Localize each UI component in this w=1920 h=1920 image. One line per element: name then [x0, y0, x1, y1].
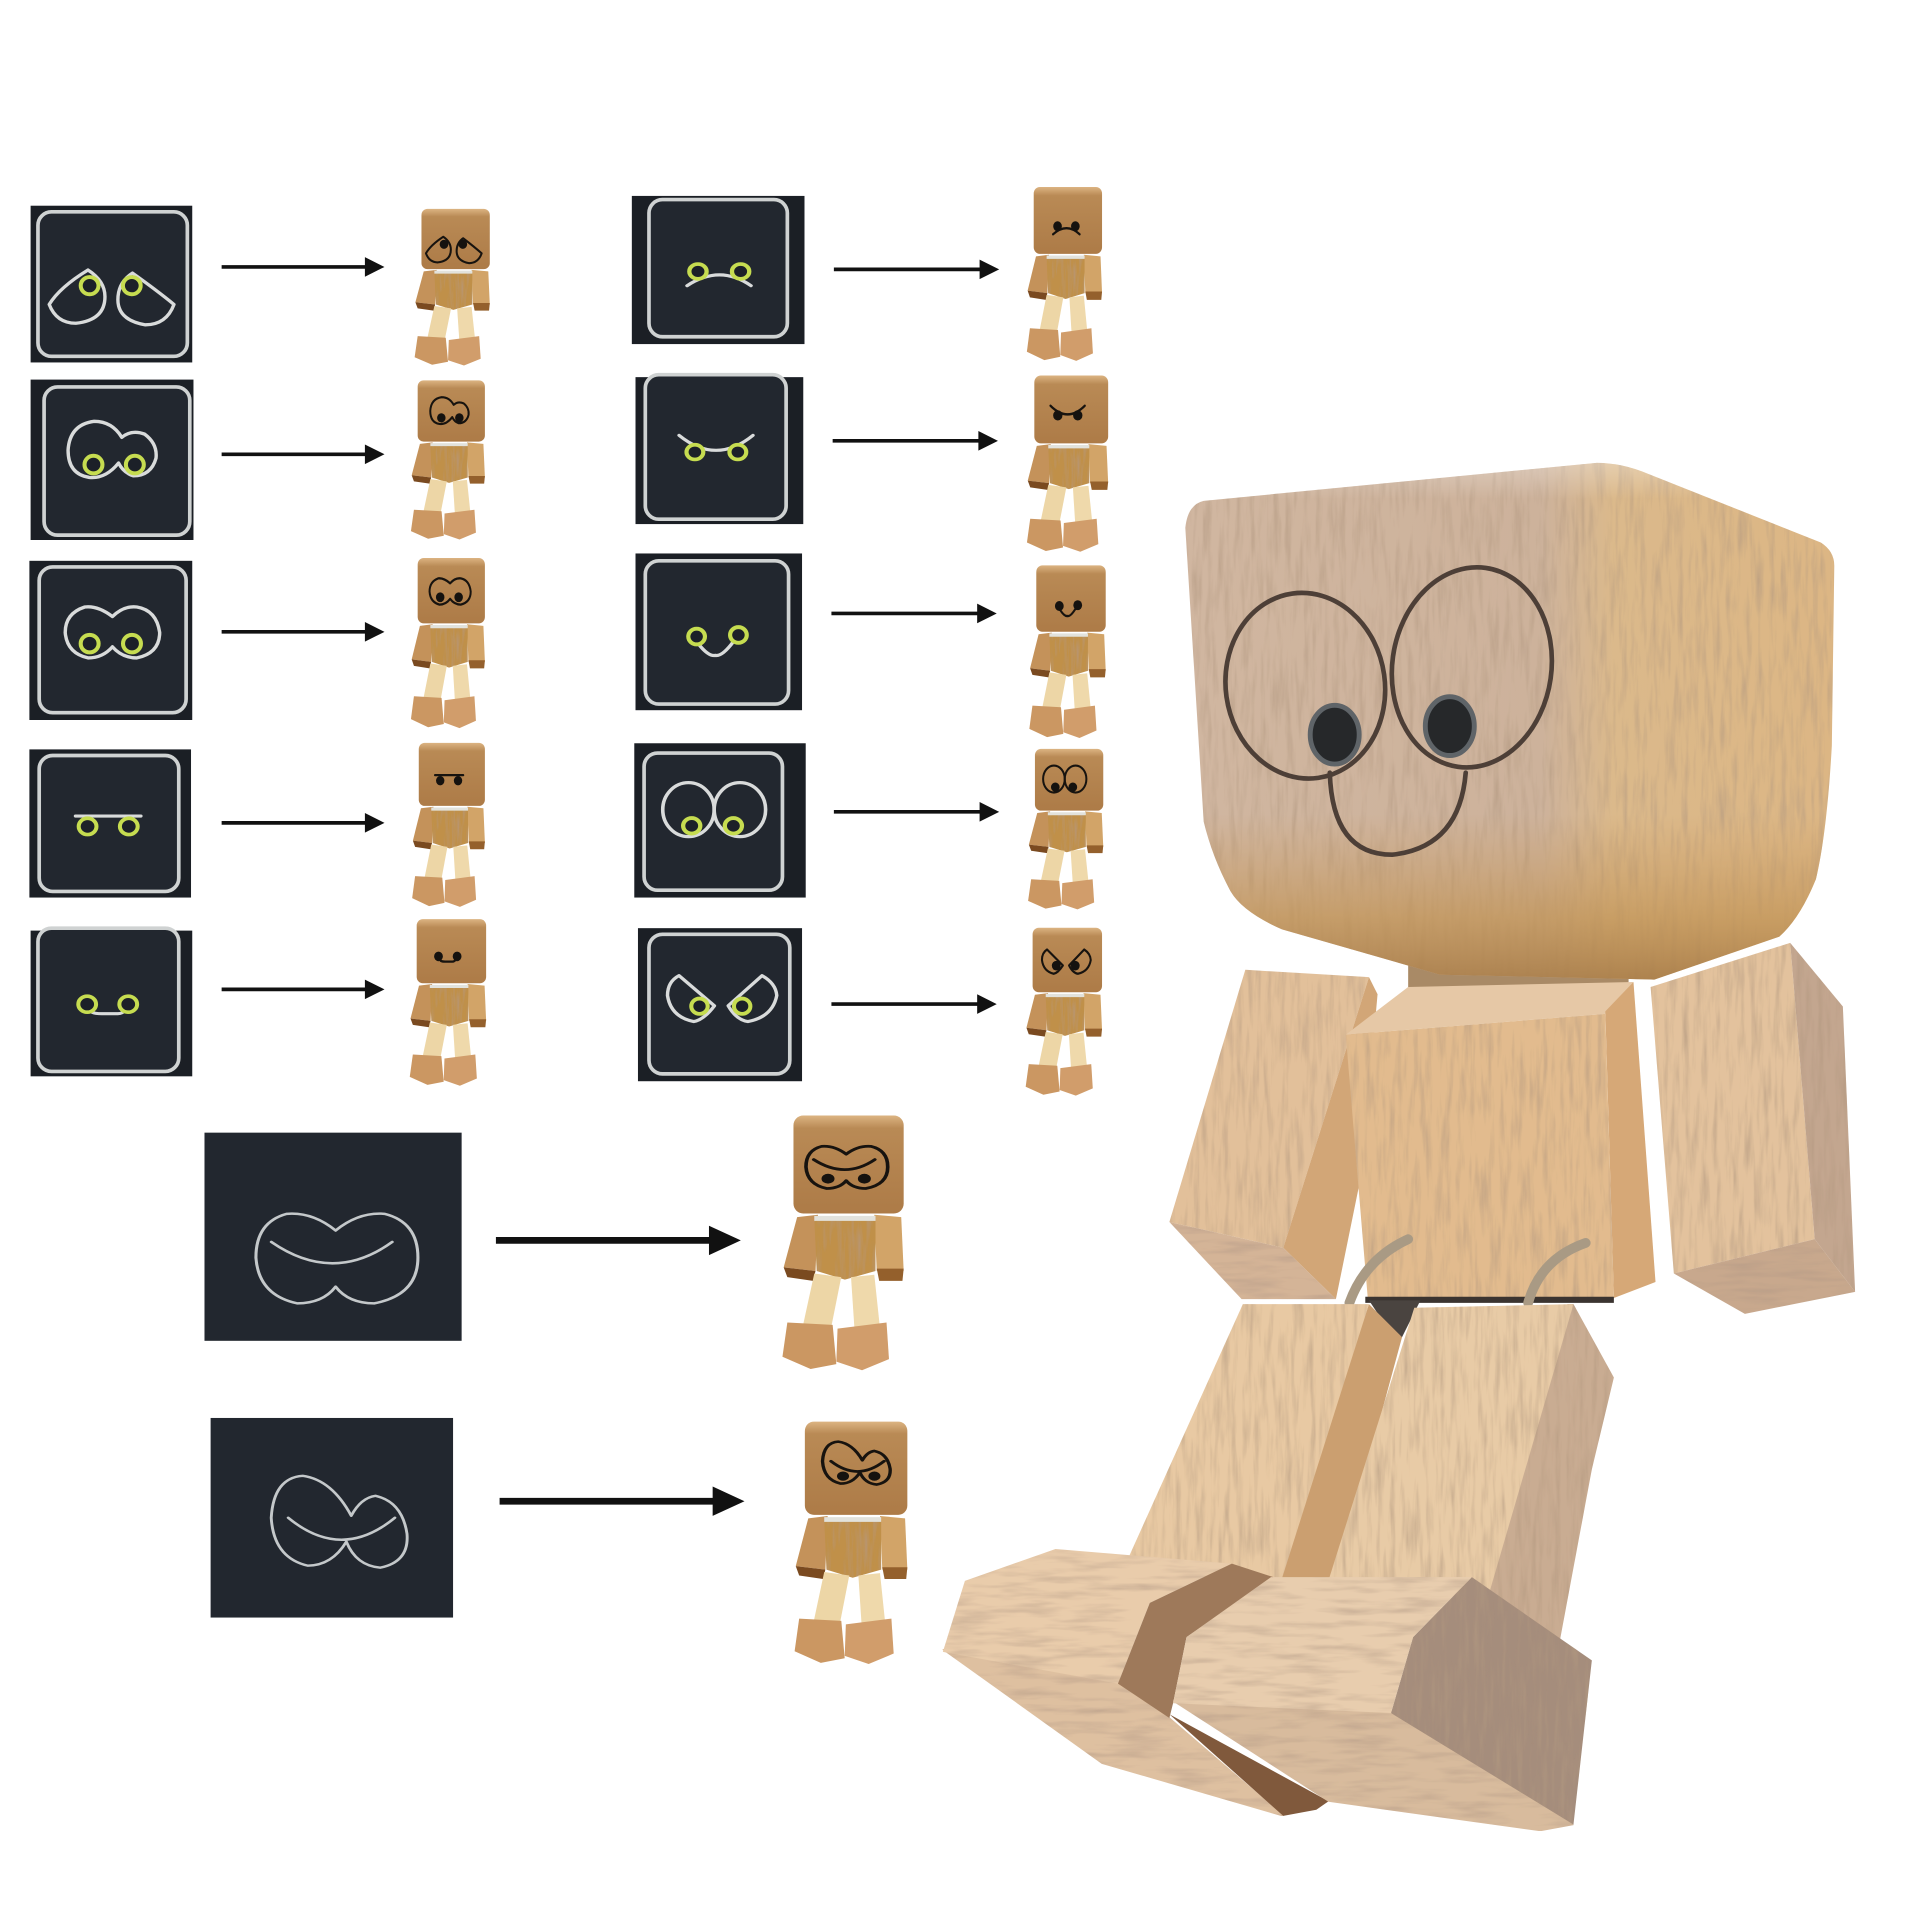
arrow: row 5 right — [831, 994, 997, 1014]
left pupil — [1310, 705, 1359, 764]
robot: big round eyes — [1028, 749, 1103, 909]
robot: uneven round eyes — [411, 380, 485, 540]
neck joint — [1408, 961, 1629, 989]
wire smile — [1330, 773, 1466, 855]
robot: smile — [1029, 565, 1106, 738]
right leg — [1325, 1304, 1614, 1653]
left foot — [943, 1549, 1329, 1816]
arrow: row 3 right — [831, 604, 997, 623]
arrow: row 4 left — [222, 813, 384, 833]
arrow: row 2 right — [833, 431, 998, 451]
robot: large peanut angry — [782, 1116, 904, 1370]
arrow: row 3 left — [222, 622, 384, 642]
left wire eye — [1214, 582, 1397, 789]
robot: sad eyes — [415, 209, 490, 366]
left leg — [1124, 1304, 1402, 1586]
wire face — [1214, 557, 1565, 855]
robot: flat smile — [410, 919, 486, 1086]
robot: frown — [1027, 187, 1102, 361]
panel: sad eyes design — [31, 206, 192, 362]
panel: large peanut outline design — [204, 1133, 462, 1341]
panel: uneven round eyes design — [31, 380, 193, 540]
torso — [1346, 982, 1656, 1303]
large wooden robot photo — [943, 463, 1855, 1831]
right pupil — [1425, 697, 1474, 756]
arrow: row 5 left — [222, 980, 384, 999]
right foot — [1173, 1577, 1592, 1831]
panel: big round eyes design — [634, 743, 806, 898]
robot: uneven peanut angry — [795, 1422, 907, 1664]
panel: flat line design — [29, 749, 191, 898]
head — [1185, 463, 1834, 980]
robot: angry brow — [1027, 376, 1108, 552]
robot: wide peanut eyes — [411, 558, 485, 728]
arrow: row 2 left — [222, 444, 384, 464]
right arm — [1651, 943, 1855, 1314]
panel: frown design — [632, 196, 804, 344]
panel: smile design — [636, 553, 802, 710]
left arm — [1169, 970, 1378, 1299]
robot: fierce eyes — [1026, 928, 1102, 1096]
panel: wide peanut eyes design — [29, 561, 192, 720]
arrow: large row 1 — [496, 1226, 741, 1255]
panel: angry brow design — [636, 375, 803, 524]
panel: flat smile design — [31, 928, 192, 1076]
arrow: large row 2 — [500, 1487, 744, 1516]
arrow: row 1 left — [222, 257, 384, 277]
right wire eye — [1379, 557, 1565, 778]
panel: fierce eyes design — [638, 928, 802, 1081]
arrow: row 1 right — [834, 260, 999, 279]
robot: flat line — [412, 743, 485, 907]
arrow: row 4 right — [834, 802, 999, 822]
panel: uneven peanut outline design — [211, 1418, 453, 1618]
wire joints — [1349, 1239, 1586, 1344]
